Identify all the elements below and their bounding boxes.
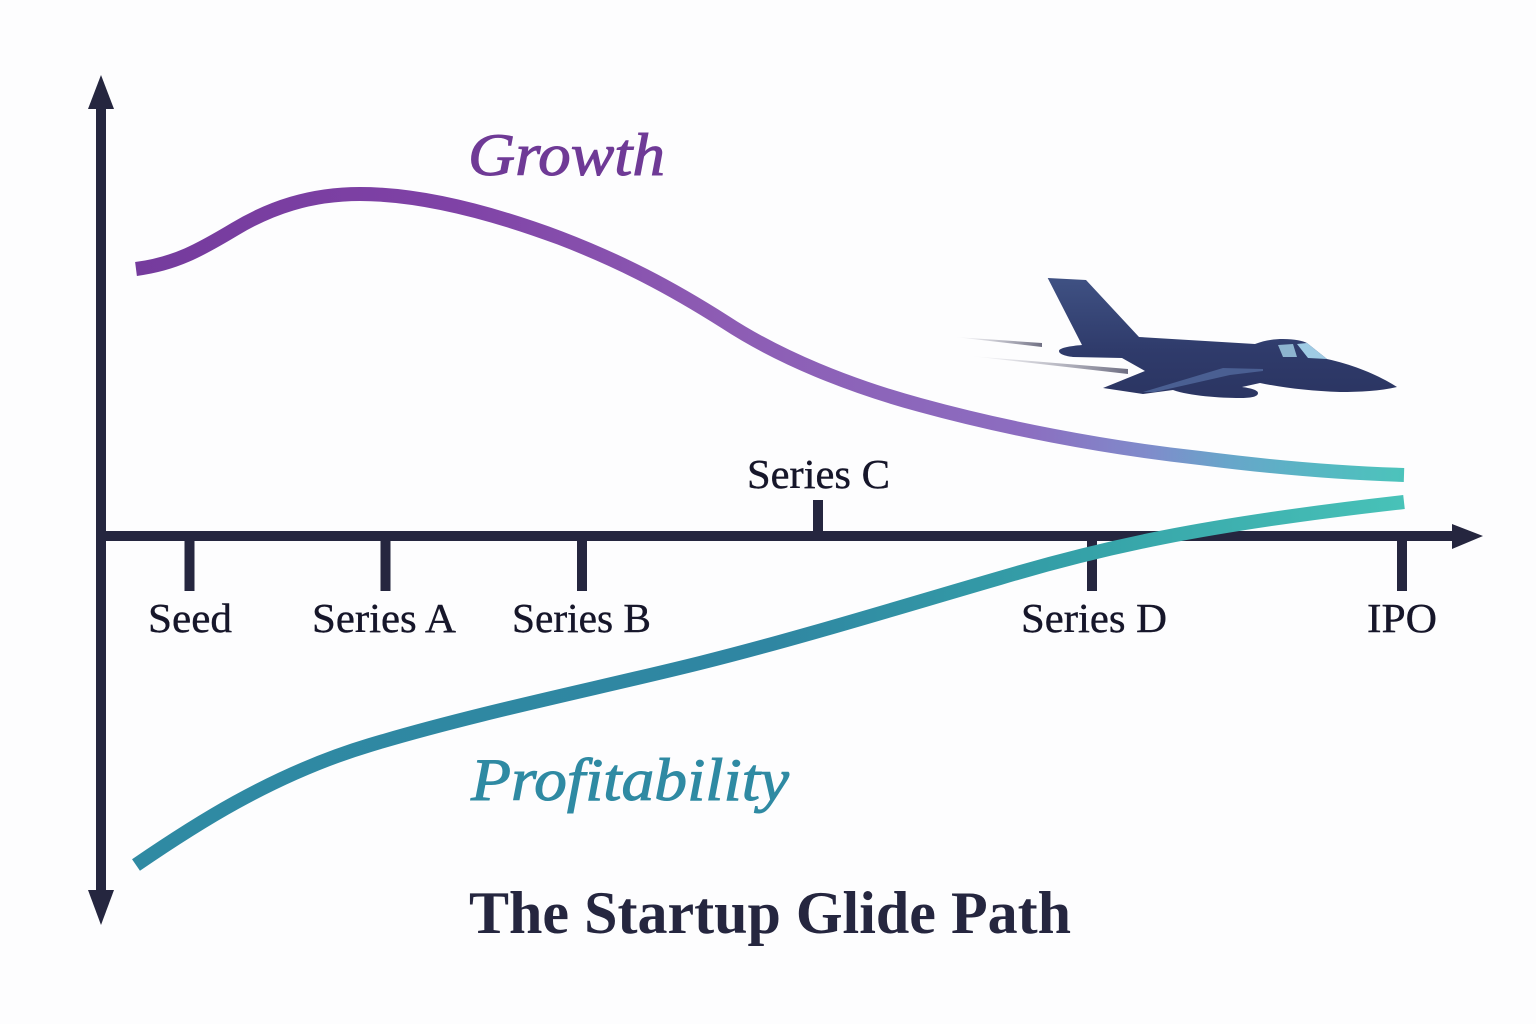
icon: jet aircraft <box>955 278 1397 398</box>
milestone: Series D: Series D <box>1021 595 1167 641</box>
milestone: Seed <box>148 536 232 641</box>
milestone: Series A <box>312 536 456 641</box>
milestone: Series D <box>1021 536 1167 641</box>
growth label: Growth <box>468 122 665 188</box>
milestone: Seed: Seed <box>148 595 232 641</box>
milestone: IPO: IPO <box>1367 595 1437 641</box>
profitability curve <box>136 502 1404 865</box>
profitability label: Profitability <box>470 747 789 813</box>
growth curve <box>136 194 1404 475</box>
milestone: Series A: Series A <box>312 595 456 641</box>
milestone: Series C <box>747 451 890 536</box>
milestone: IPO <box>1367 536 1437 641</box>
title: The Startup Glide Path <box>469 880 1071 946</box>
milestone: Series B <box>512 536 651 641</box>
horizontal axis <box>104 524 1483 549</box>
vertical axis <box>88 75 114 925</box>
milestone: Series C: Series C <box>747 451 890 497</box>
milestone: Series B: Series B <box>512 595 651 641</box>
